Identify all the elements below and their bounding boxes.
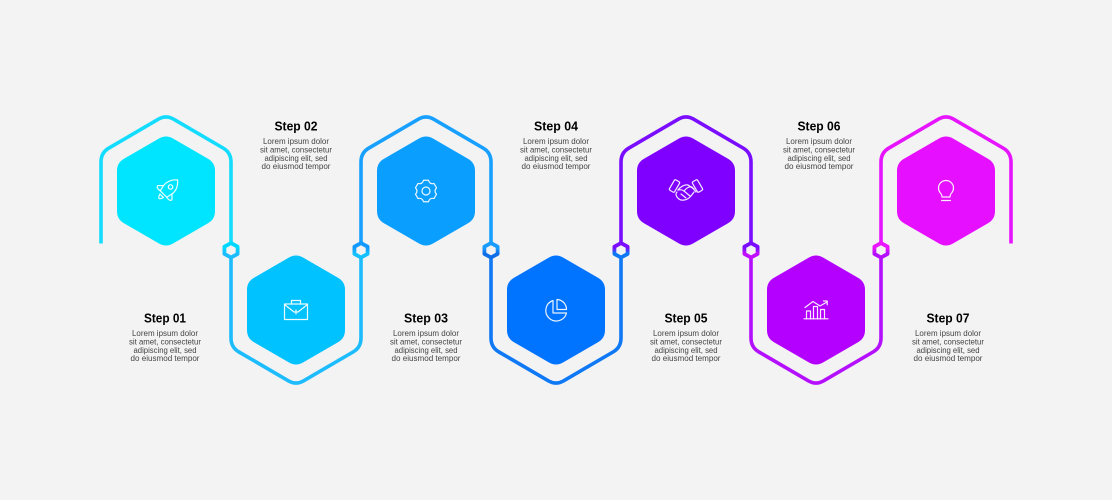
- text: step 05: sit amet, consectetur: [650, 337, 722, 346]
- text: step 07: do eiusmod tempor: [914, 354, 983, 363]
- text: step 04: adipiscing elit, sed: [524, 154, 588, 163]
- text: step 03: adipiscing elit, sed: [394, 346, 458, 355]
- text: step 04: sit amet, consectetur: [520, 145, 592, 154]
- icon: handshake: [669, 179, 703, 200]
- text: step 02: Lorem ipsum dolor: [263, 137, 329, 146]
- text: step 05: Lorem ipsum dolor: [653, 329, 719, 338]
- hexagon: step 2: [247, 255, 345, 365]
- text: step 05: do eiusmod tempor: [652, 354, 721, 363]
- text: step 07: Lorem ipsum dolor: [915, 329, 981, 338]
- icon: growth chart: [804, 301, 828, 319]
- hexagon: step 1: [117, 136, 215, 246]
- text: step 06: Lorem ipsum dolor: [786, 137, 852, 146]
- text: step 06: adipiscing elit, sed: [788, 154, 850, 163]
- text: step 07: adipiscing elit, sed: [916, 346, 980, 355]
- text: step 02: do eiusmod tempor: [262, 162, 331, 171]
- text: step 01: adipiscing elit, sed: [134, 346, 196, 355]
- node 3: [484, 243, 498, 258]
- text: step 03: do eiusmod tempor: [392, 354, 461, 363]
- hexagon: step 6: [767, 255, 865, 365]
- text: step 01: do eiusmod tempor: [130, 354, 200, 363]
- node 5: [744, 243, 758, 258]
- hexagon: step 7: [897, 136, 995, 246]
- icon: pie chart: [546, 300, 566, 321]
- text: step 02: [260, 118, 332, 171]
- text: step 07: sit amet, consectetur: [912, 337, 984, 346]
- text: step 04: Step 04: [534, 118, 579, 134]
- text: step 02: sit amet, consectetur: [260, 145, 332, 154]
- text: step 01: [129, 310, 201, 363]
- text: step 06: Step 06: [798, 118, 840, 134]
- node 1: [224, 243, 238, 258]
- text: step 07: [912, 310, 984, 363]
- text: step 06: do eiusmod tempor: [784, 162, 854, 171]
- text: step 05: adipiscing elit, sed: [654, 346, 718, 355]
- text: step 05: Step 05: [664, 310, 708, 326]
- text: step 04: do eiusmod tempor: [522, 162, 591, 171]
- text: step 03: [390, 310, 462, 363]
- icon: gear: [415, 180, 437, 202]
- node 2: [354, 243, 368, 258]
- node 6: [874, 243, 888, 258]
- icon: briefcase: [284, 300, 308, 320]
- hexagon: step 3: [377, 136, 475, 246]
- icon: rocket: [152, 173, 185, 206]
- text: step 04: [520, 118, 592, 171]
- text: step 06: sit amet, consectetur: [783, 145, 855, 154]
- text: step 02: adipiscing elit, sed: [264, 154, 328, 163]
- icon: light bulb: [938, 180, 954, 200]
- text: step 03: sit amet, consectetur: [390, 337, 462, 346]
- connector line: step 5: [621, 117, 751, 243]
- connector line: step 1: [101, 117, 231, 244]
- text: step 01: Lorem ipsum dolor: [132, 329, 198, 338]
- node 4: [614, 243, 628, 258]
- text: step 02: Step 02: [274, 118, 318, 134]
- connector line: step 7: [881, 117, 1011, 244]
- connector line: step 2: [231, 258, 361, 383]
- connector line: step 6: [751, 258, 881, 383]
- text: step 01: sit amet, consectetur: [129, 337, 201, 346]
- hexagon: step 4: [507, 255, 605, 365]
- connector line: step 4: [491, 258, 621, 383]
- text: step 03: Lorem ipsum dolor: [393, 329, 459, 338]
- text: step 05: [650, 310, 722, 363]
- text: step 07: Step 07: [926, 310, 970, 326]
- text: step 06: [783, 118, 855, 171]
- text: step 04: Lorem ipsum dolor: [523, 137, 589, 146]
- hexagon: step 5: [637, 136, 735, 246]
- text: step 03: Step 03: [404, 310, 448, 326]
- connector line: step 3: [361, 117, 491, 243]
- text: step 01: Step 01: [144, 310, 186, 326]
